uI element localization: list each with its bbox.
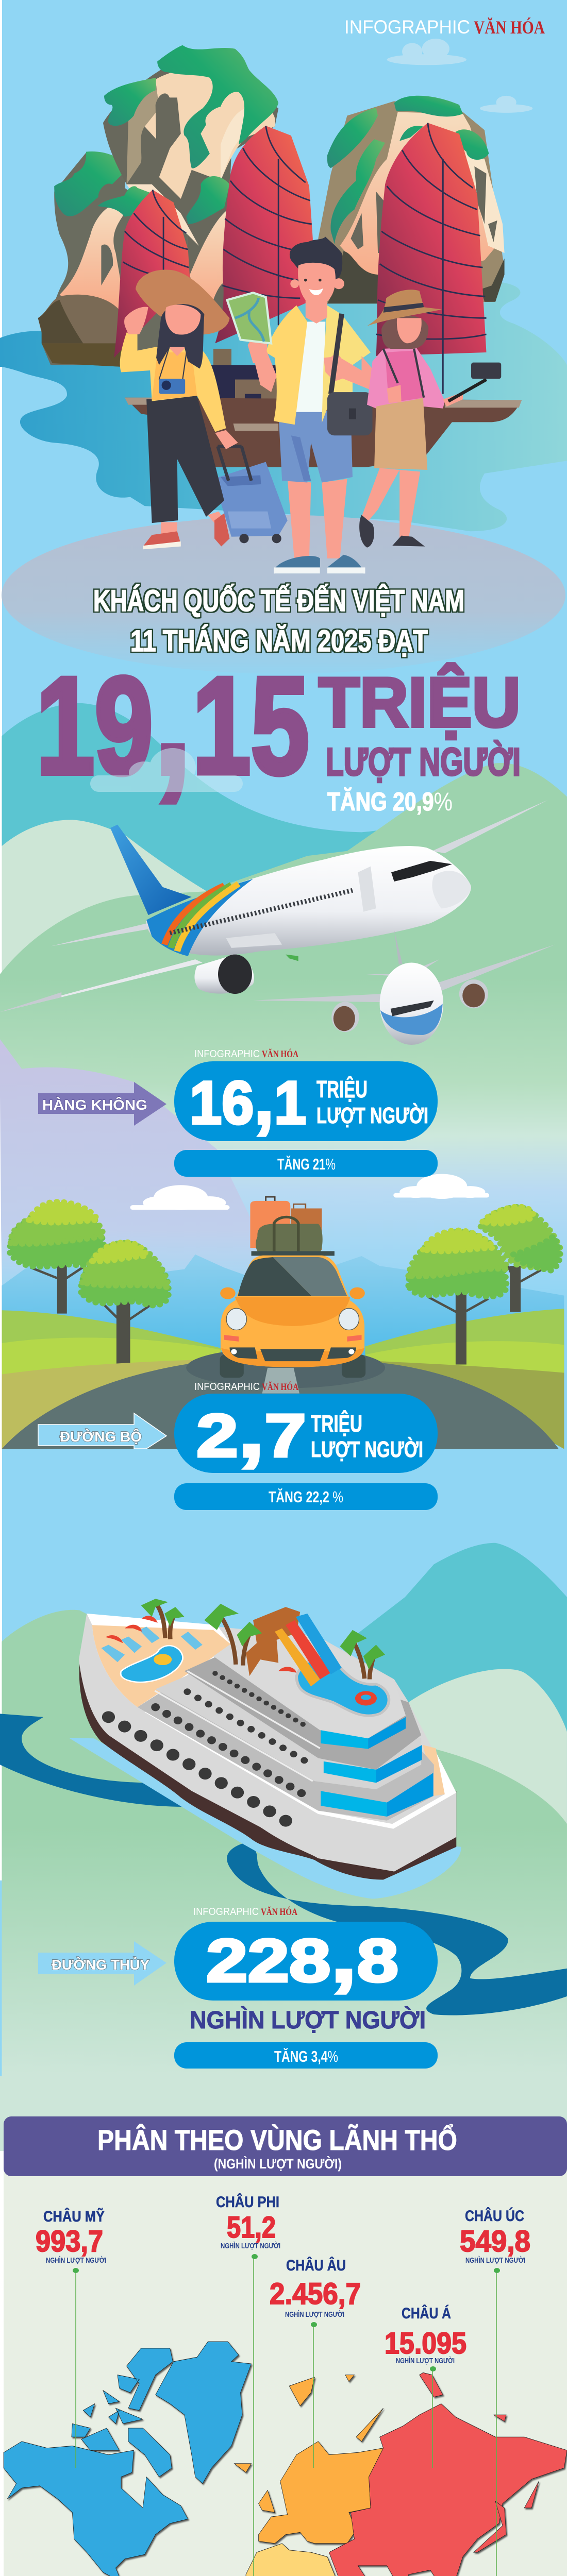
callout: Asia — [385, 2304, 466, 2468]
arrow: air label: HÀNG KHÔNG — [42, 1096, 147, 1113]
water under ship — [69, 1738, 461, 1899]
callout: Europe: 2.456,7 — [270, 2277, 361, 2311]
road value pill: TRIỆU — [311, 1410, 362, 1437]
teal hill — [358, 1543, 567, 1794]
callout: Oceania: CHÂU ÚC — [465, 2207, 524, 2225]
purple hill — [0, 1039, 296, 1312]
hills behind the plane — [0, 703, 567, 1082]
Asia — [329, 2372, 567, 2576]
water value pill: 228 ,8 — [206, 1911, 398, 1998]
callout: Africa: 51,2 — [227, 2211, 276, 2244]
pale ground above the map — [0, 2076, 567, 2154]
callout: Africa — [216, 2193, 280, 2576]
Africa — [246, 2544, 354, 2576]
top watermark: INFOGRAPHIC — [344, 16, 470, 38]
man with map — [227, 236, 381, 573]
watermark — [194, 1048, 298, 1060]
road value pill: 2,7 — [196, 1386, 306, 1473]
road growth pill — [174, 1483, 438, 1510]
North America and Arctic islands — [4, 2342, 252, 2576]
icon: car with luggage — [220, 1197, 365, 1378]
growth 20.9%: TĂNG 20,9% — [327, 787, 453, 816]
left rock — [38, 151, 188, 367]
pale hill — [409, 1669, 567, 1893]
watermark: INFOGRAPHIC — [193, 1906, 259, 1918]
top watermark — [344, 16, 545, 38]
callout: Americas: CHÂU MỸ — [43, 2208, 105, 2225]
callout: Africa: NGHÌN LƯỢT NGƯỜI — [221, 2241, 280, 2250]
air value pill: 16,1 — [190, 1054, 306, 1140]
road — [2, 1360, 559, 1449]
sandbank continued — [2, 516, 565, 674]
palm trees — [141, 1599, 385, 1679]
callout: Oceania: 549,8 — [460, 2225, 530, 2258]
upper deck pool and slides — [296, 1657, 389, 1716]
callout: Americas: 993,7 — [36, 2225, 103, 2258]
clouds — [387, 39, 532, 113]
water growth pill — [174, 2042, 438, 2069]
callout: Africa: CHÂU PHI — [216, 2193, 279, 2211]
main number 19,15 million: 19,15 — [36, 606, 309, 813]
trees — [10, 1202, 560, 1365]
cloud over the number — [90, 748, 243, 792]
air value pill: LƯỢT NGƯỜI — [316, 1103, 428, 1128]
watermark: VĂN HÓA — [262, 1048, 298, 1060]
watermark: VĂN HÓA — [261, 1906, 297, 1918]
panel: water travel — [38, 1911, 438, 2069]
callout: Europe: NGHÌN LƯỢT NGƯỜI — [285, 2310, 344, 2319]
teal hill — [2, 703, 567, 994]
sandbank — [25, 515, 542, 567]
callout: Americas: NGHÌN LƯỢT NGƯỜI — [46, 2256, 106, 2265]
road scene background — [2, 1082, 567, 1298]
watermark: INFOGRAPHIC — [194, 1381, 260, 1393]
callouts for regions — [36, 2193, 530, 2576]
road scene — [0, 1039, 564, 1449]
panel: air travel — [38, 1054, 438, 1177]
icon: small front-view airliner — [253, 930, 555, 1045]
woman with hat and suitcase — [120, 270, 288, 549]
road growth pill: TĂNG 22,2 % — [269, 1488, 343, 1506]
water unit: NGHÌN LƯỢT NGƯỜI — [190, 2006, 426, 2034]
woman with selfie stick — [359, 290, 501, 548]
callout: Oceania — [460, 2207, 530, 2576]
heading: by region — [4, 2116, 567, 2176]
callout: Asia: CHÂU Á — [402, 2304, 451, 2322]
callout: Asia: 15.095 — [385, 2327, 466, 2360]
title — [93, 584, 464, 658]
ship scene background — [0, 1543, 567, 2112]
panel: road travel — [38, 1386, 438, 1510]
air value pill — [174, 1054, 438, 1141]
green hill — [0, 763, 567, 1082]
road value pill — [174, 1386, 438, 1473]
main number 19,15 million: TRIỆU — [319, 663, 521, 741]
clouds — [130, 1174, 489, 1210]
pale hill — [2, 820, 208, 974]
watermark: VĂN HÓA — [262, 1381, 298, 1393]
watermark: INFOGRAPHIC — [194, 1048, 260, 1060]
water growth pill: TĂNG 3,4% — [274, 2047, 338, 2065]
icon: airliner — [0, 800, 548, 1012]
travellers group — [120, 236, 501, 573]
road shoulders — [2, 1359, 221, 1449]
callout: Oceania: NGHÌN LƯỢT NGƯỜI — [465, 2256, 525, 2265]
green ground — [2, 1610, 567, 2112]
sea — [0, 282, 567, 531]
water value pill — [174, 1911, 438, 2001]
callout: Asia: NGHÌN LƯỢT NGƯỜI — [396, 2356, 455, 2365]
road value pill: LƯỢT NGƯỜI — [311, 1436, 423, 1462]
river — [0, 1714, 567, 2015]
watermark — [194, 1381, 298, 1393]
title: 11 THÁNG NĂM 2025 ĐẠT — [130, 624, 428, 658]
callout: Europe — [270, 2257, 361, 2468]
heading: by region: PHÂN THEO VÙNG LÃNH THỔ — [97, 2124, 457, 2156]
mountains — [2, 1253, 564, 1378]
arrow: water label: ĐƯỜNG THỦY — [52, 1956, 149, 1973]
watermark — [193, 1906, 297, 1918]
pool and sun deck — [121, 1646, 183, 1682]
callout: Americas — [36, 2208, 106, 2468]
world map — [4, 2342, 567, 2576]
arrow: air label — [38, 1082, 166, 1126]
boat hull and cabin — [125, 349, 522, 467]
hero scene: limestone islands and junk boat — [0, 39, 567, 567]
main number 19,15 million — [36, 606, 521, 813]
title: KHÁCH QUỐC TẾ ĐẾN VIỆT NAM — [93, 584, 464, 618]
Europe — [235, 2375, 383, 2544]
centre rock — [97, 45, 278, 311]
heading: by region: (NGHÌN LƯỢT NGƯỜI) — [214, 2156, 342, 2172]
white map margin — [0, 2151, 4, 2576]
map panel background — [4, 2164, 567, 2576]
arrow: road label: ĐƯỜNG BỘ — [60, 1428, 142, 1445]
icon: cruise ship — [79, 1599, 456, 1880]
left page margin — [0, 0, 2, 1880]
air value pill: TRIỆU — [316, 1076, 368, 1103]
top watermark: VĂN HÓA — [474, 17, 545, 38]
grass — [2, 1309, 564, 1375]
right rock — [318, 96, 505, 303]
air growth pill: TĂNG 21% — [277, 1155, 336, 1173]
air growth pill — [174, 1150, 438, 1177]
arrow: road label — [38, 1413, 166, 1449]
boat sails — [114, 123, 487, 394]
arrow: water label — [38, 1941, 166, 1986]
callout: Europe: CHÂU ÂU — [286, 2257, 346, 2274]
